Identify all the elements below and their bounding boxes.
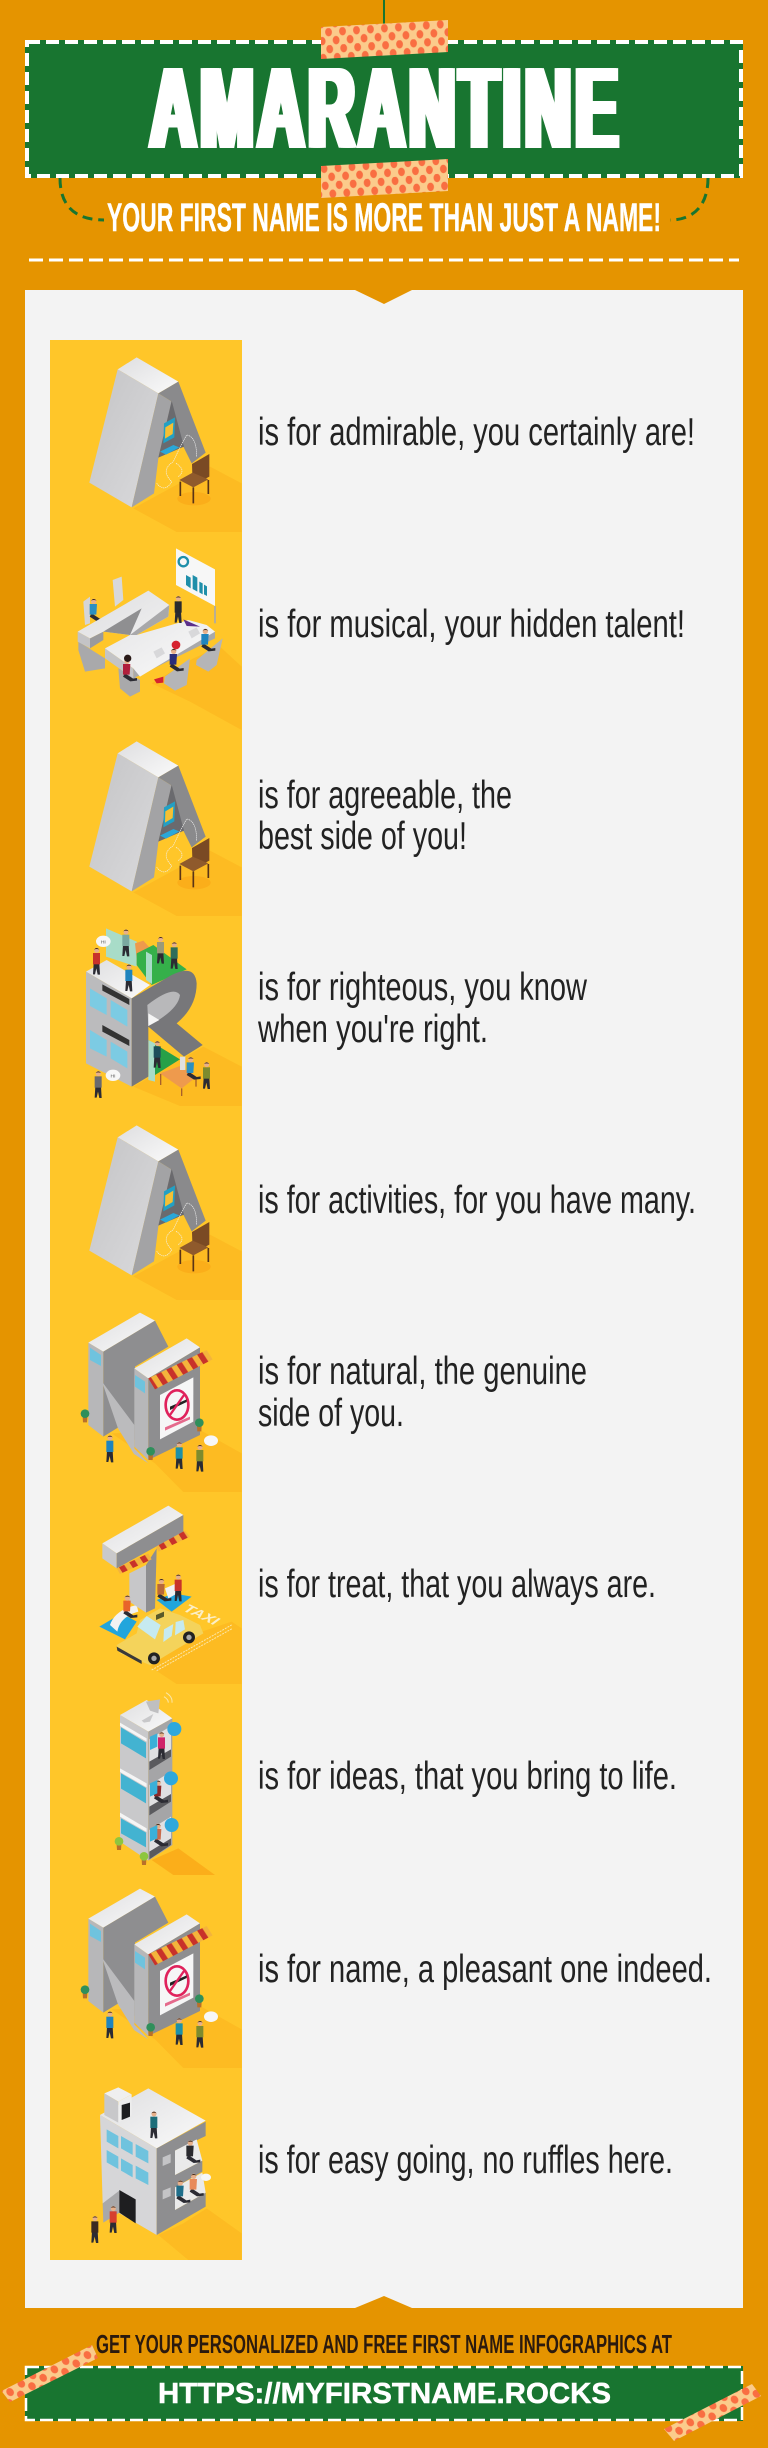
letter A: activities [89, 1125, 242, 1300]
speech bubble HI [96, 936, 111, 947]
letter N: name [81, 1889, 242, 2068]
tape: banner top [321, 20, 448, 59]
speech bubble HI lower: HI [110, 1073, 115, 1079]
letter N: natural [81, 1313, 242, 1492]
connector left [60, 178, 104, 220]
text: N [258, 1350, 587, 1435]
speech bubble HI: HI [101, 939, 106, 945]
letter E: easy going [91, 2087, 242, 2260]
letter T: treat [99, 1506, 242, 1684]
connector right [670, 178, 708, 220]
footer url: HTTPS://MYFIRSTNAME.ROCKS [158, 2378, 611, 2410]
dashed divider [29, 258, 739, 262]
letter M: musical [78, 548, 242, 730]
text: A second [258, 774, 512, 858]
letter R: righteous [86, 928, 242, 1106]
text: R [257, 966, 588, 1051]
letter A: agreeable [89, 741, 242, 916]
top hanging line [383, 0, 385, 24]
tape: banner bottom [321, 159, 448, 198]
text: A second: best side of you! [258, 815, 467, 858]
yellow illustration column [50, 340, 242, 2260]
title: AMARANTINE [150, 43, 622, 173]
text: R: when you're right. [257, 1008, 488, 1051]
letter I: ideas [115, 1693, 215, 1875]
title banner [25, 40, 743, 178]
tape: footer left [2, 2345, 98, 2402]
letter A: admirable [89, 357, 242, 532]
tape: footer right [664, 2384, 761, 2441]
text: N: side of you. [258, 1392, 404, 1435]
text: N: is for natural, the genuine [258, 1350, 587, 1393]
speech bubble HI lower [106, 1070, 120, 1081]
text: A second: is for agreeable, the [258, 774, 512, 817]
text: R: is for righteous, you know [258, 966, 588, 1009]
main panel [25, 290, 743, 2308]
taxi road lettering: TAXI [179, 1603, 224, 1627]
footer banner [25, 2366, 743, 2421]
